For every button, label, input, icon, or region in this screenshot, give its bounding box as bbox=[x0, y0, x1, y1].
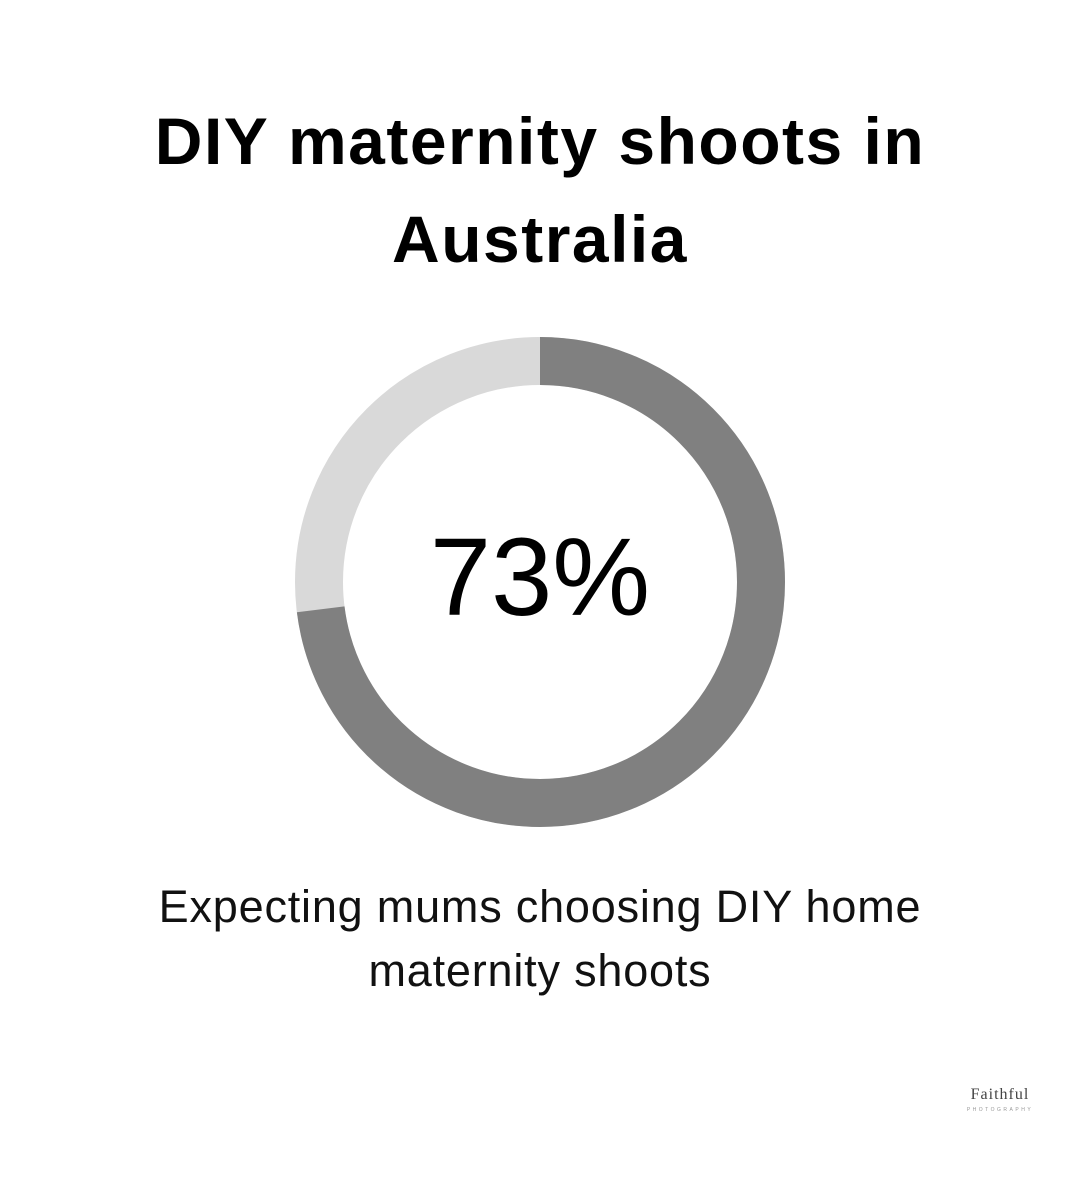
title bbox=[155, 104, 925, 276]
logo bbox=[967, 1086, 1033, 1113]
donut background ring bbox=[319, 361, 761, 803]
title: DIY maternity shoots in bbox=[155, 104, 925, 178]
description text: Expecting mums choosing DIY home bbox=[159, 881, 921, 932]
logo: Faithful bbox=[971, 1086, 1029, 1103]
description text bbox=[159, 881, 921, 996]
donut value arc 73% bbox=[319, 361, 761, 803]
title: Australia bbox=[392, 202, 688, 276]
percentage label: 73% bbox=[430, 516, 650, 639]
description text: maternity shoots bbox=[369, 945, 711, 996]
logo: PHOTOGRAPHY bbox=[967, 1107, 1033, 1113]
